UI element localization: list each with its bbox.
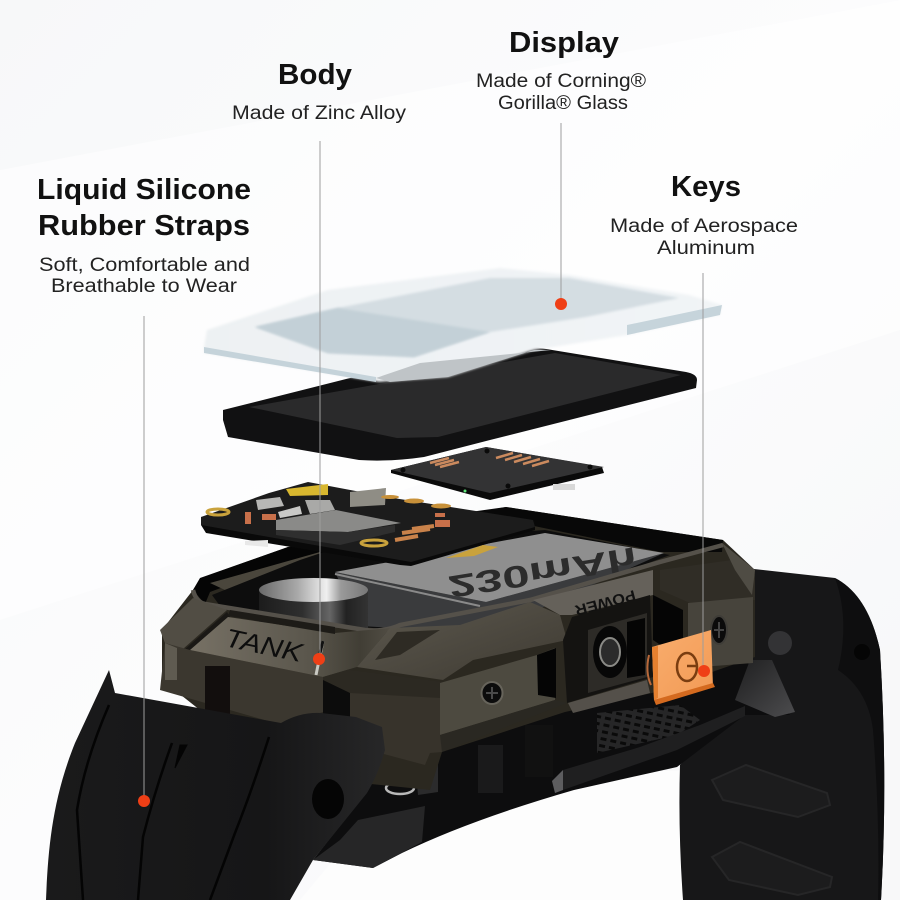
right side panel	[653, 595, 683, 660]
callout: body	[232, 59, 407, 124]
port	[563, 595, 653, 713]
callout: straps: Soft, Comfortable and	[39, 255, 250, 276]
callout: display: Gorilla® Glass	[498, 93, 628, 114]
center lower band	[323, 667, 443, 710]
marker: display	[555, 298, 567, 310]
main circuit board	[201, 482, 535, 566]
brand text: TANK	[223, 622, 307, 668]
callout: keys: Aluminum	[657, 238, 755, 259]
rear rim	[340, 507, 723, 552]
left strap	[46, 670, 385, 900]
small circuit board	[391, 447, 604, 500]
power panel	[533, 570, 653, 615]
body shell	[162, 507, 755, 790]
callout: keys	[610, 171, 798, 259]
lower block	[313, 806, 425, 868]
tank panel	[190, 617, 390, 677]
screw panel	[440, 648, 555, 735]
lower front panel	[160, 643, 323, 725]
marker: body	[313, 653, 325, 665]
callout: display: Display	[509, 27, 619, 59]
center bevel	[357, 602, 567, 680]
right strap	[679, 568, 884, 900]
marker: keys	[698, 665, 710, 677]
power key	[647, 630, 715, 705]
cylinder	[259, 578, 368, 630]
callout: body: Body	[278, 59, 352, 91]
callout: straps	[37, 174, 251, 297]
leader lines	[144, 123, 703, 801]
glass cover	[204, 268, 722, 382]
callout: display: Made of Corning®	[476, 71, 646, 92]
watch base underside	[313, 660, 795, 868]
metal body	[160, 507, 755, 790]
battery	[335, 533, 664, 640]
callout: straps: Breathable to Wear	[51, 276, 238, 297]
power label: POWER	[573, 586, 637, 619]
callout: display	[476, 27, 646, 114]
cavity	[212, 530, 670, 632]
battery label: 230mAh	[446, 540, 639, 605]
screw right	[711, 616, 727, 644]
left bevel	[160, 598, 227, 649]
callout: body: Made of Zinc Alloy	[232, 103, 407, 124]
marker: straps	[138, 795, 150, 807]
callout: straps: Rubber Straps	[38, 210, 250, 242]
callout: keys: Keys	[671, 171, 741, 203]
display panel	[223, 347, 697, 461]
screw left	[482, 682, 502, 704]
rim	[193, 545, 723, 630]
exploded watch illustration	[46, 268, 884, 900]
callout: keys: Made of Aerospace	[610, 216, 798, 237]
callout: straps: Liquid Silicone	[37, 174, 251, 206]
